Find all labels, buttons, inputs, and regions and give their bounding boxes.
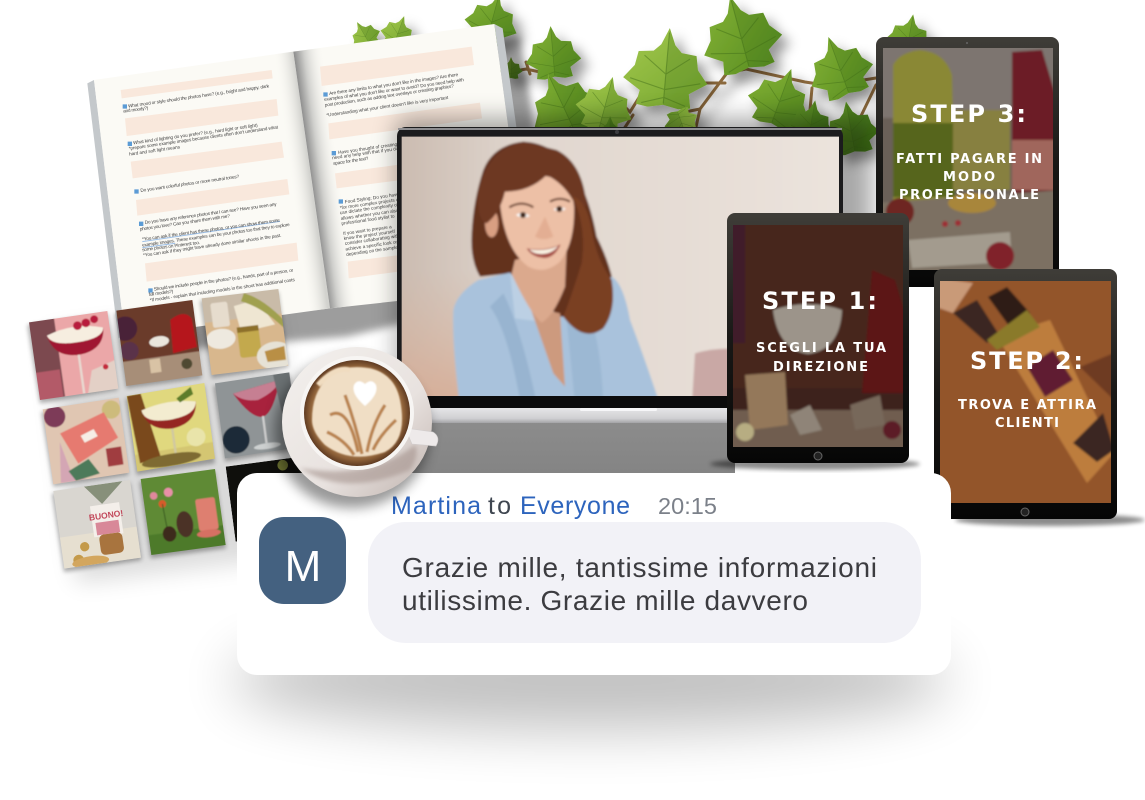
laptop lower body — [400, 420, 735, 480]
laptop shadow — [396, 118, 872, 413]
avatar: M — [285, 542, 321, 591]
left page: *You can ask if they might have already done similar shoots in the past. — [143, 233, 282, 258]
laptop — [390, 118, 872, 480]
right page: can dictate the complexity of — [339, 202, 399, 215]
right page: examples of what you don't like or want to avoid? Do you need help with — [324, 77, 464, 102]
handle — [405, 428, 438, 446]
right page: need any help with that if you do — [332, 146, 399, 160]
left page: hard and soft light means — [129, 144, 181, 157]
message bubble: Grazie mille, tantissime informazioni — [402, 552, 877, 583]
front hair — [478, 142, 587, 223]
sender line: Everyone — [520, 492, 630, 520]
left page: some photos on Pinterest too. — [142, 240, 200, 252]
open book — [87, 24, 560, 353]
step 1 text: SCEGLI LA TUA — [756, 341, 886, 356]
right page: consider collaborating with — [344, 233, 400, 246]
tile: green with egg — [140, 469, 226, 555]
tile: buono box with cookies — [53, 481, 141, 568]
avatar — [259, 517, 346, 604]
right page: depending on the sample — [346, 245, 399, 257]
coffee with latte art — [304, 360, 410, 466]
left page — [94, 52, 330, 337]
right page: *Understanding what your client doesn't like is very important — [326, 95, 449, 118]
sender line: Martina — [391, 492, 481, 520]
left page: What mood or style should the photos have? (e.g., bright and happy, dark — [128, 83, 270, 109]
right page: professional food stylist to — [341, 213, 395, 226]
right page: space for the text? — [333, 156, 369, 166]
right page — [293, 24, 530, 308]
ivy vine — [344, 0, 936, 158]
step 3 text: STEP 3: — [911, 100, 1026, 128]
hair back — [471, 142, 614, 332]
chair — [692, 348, 727, 396]
left page: Do you have any reference photos that I can see? Have you seen any — [144, 201, 278, 225]
face — [500, 175, 574, 270]
left page: example images. These examples can be your photos too that they to explore — [142, 222, 290, 248]
left page: *If models - explain that including models in the shoot has additional costs — [149, 277, 296, 303]
step 1 text: STEP 1: — [762, 287, 877, 315]
tablet: step 3 — [875, 37, 1061, 287]
step 2 text: CLIENTI — [995, 416, 1059, 431]
tile: buono box with cookies: BUONO! — [88, 508, 124, 523]
sender line: to — [488, 492, 511, 520]
tablet: step 2 — [932, 269, 1145, 526]
eyes, nose and smile — [516, 213, 530, 217]
leaves — [344, 0, 936, 158]
tile: jar and plates — [202, 289, 288, 375]
tile: dark photo — [226, 458, 302, 542]
photo grid — [25, 284, 311, 573]
tile: yellow cocktail — [126, 383, 215, 472]
left page: full models?) — [148, 289, 174, 297]
step 1 screen photo — [733, 225, 903, 447]
right page: know the project yourself — [343, 229, 396, 241]
step 3 text: MODO — [943, 170, 995, 185]
saucer — [282, 347, 432, 497]
step 2 screen photo — [940, 281, 1111, 503]
cup rim — [300, 356, 414, 470]
vine stems — [515, 62, 876, 145]
left page: *prepare some example images because clients often don't understand what — [128, 124, 279, 151]
tile: pink cocktail — [29, 311, 118, 400]
laptop screen photo — [402, 136, 839, 396]
step 3 text: FATTI PAGARE IN — [896, 152, 1042, 167]
neck — [512, 247, 567, 323]
step 3 screen photo — [883, 48, 1053, 270]
left page: and moody?) — [123, 105, 149, 114]
left page: Should we include people in the photos? (e.g., hands, part of a person, or — [153, 268, 294, 292]
shirt — [452, 270, 658, 396]
right page: Food Styling: Do you have a — [344, 191, 403, 204]
right page: *for more complex projects or — [339, 197, 401, 210]
left page: *You can ask if the client has these photos, or you can show them some — [142, 218, 281, 242]
step 1 text — [756, 287, 886, 375]
chest — [530, 307, 565, 387]
right page: Are there any limits to what you don't like in the images? Are there — [329, 72, 459, 96]
right page: If you want to prepare a — [343, 224, 392, 236]
right page: post production, such as adding text overlays or creating graphics? — [324, 83, 454, 108]
soft shadow under chat card — [46, 306, 950, 730]
tile: gray martini — [215, 372, 292, 458]
left page: photos you love? Can you share them with me? — [139, 213, 231, 232]
step 1 text: DIREZIONE — [773, 360, 868, 375]
step 2 text — [958, 347, 1096, 431]
left page: What kind of lighting do you prefer? (e.g., hard light or soft light) — [133, 123, 258, 145]
message bubble: utilissime. Grazie mille davvero — [402, 585, 808, 616]
tile: red kettle and cup — [116, 300, 202, 386]
sender line: 20:15 — [658, 493, 717, 519]
step 2 text: STEP 2: — [970, 347, 1083, 375]
right page: achieve a specific look or — [345, 239, 398, 252]
sender line — [391, 492, 717, 520]
left page: Do you want colorful photos or more neutral tones? — [140, 174, 240, 193]
tile: gift box — [42, 398, 130, 484]
tile shadows — [27, 292, 298, 572]
step 3 text — [896, 100, 1042, 203]
right page: allows whether you can also — [340, 208, 399, 221]
step 2 text: TROVA E ATTIRA — [958, 398, 1096, 413]
message bubble — [368, 522, 921, 643]
step 3 text: PROFESSIONALE — [899, 188, 1039, 203]
coffee cup — [274, 347, 438, 508]
right page: Have you thought of creating a — [338, 141, 402, 155]
chat card — [237, 473, 951, 675]
tablet: step 1 — [710, 213, 920, 470]
